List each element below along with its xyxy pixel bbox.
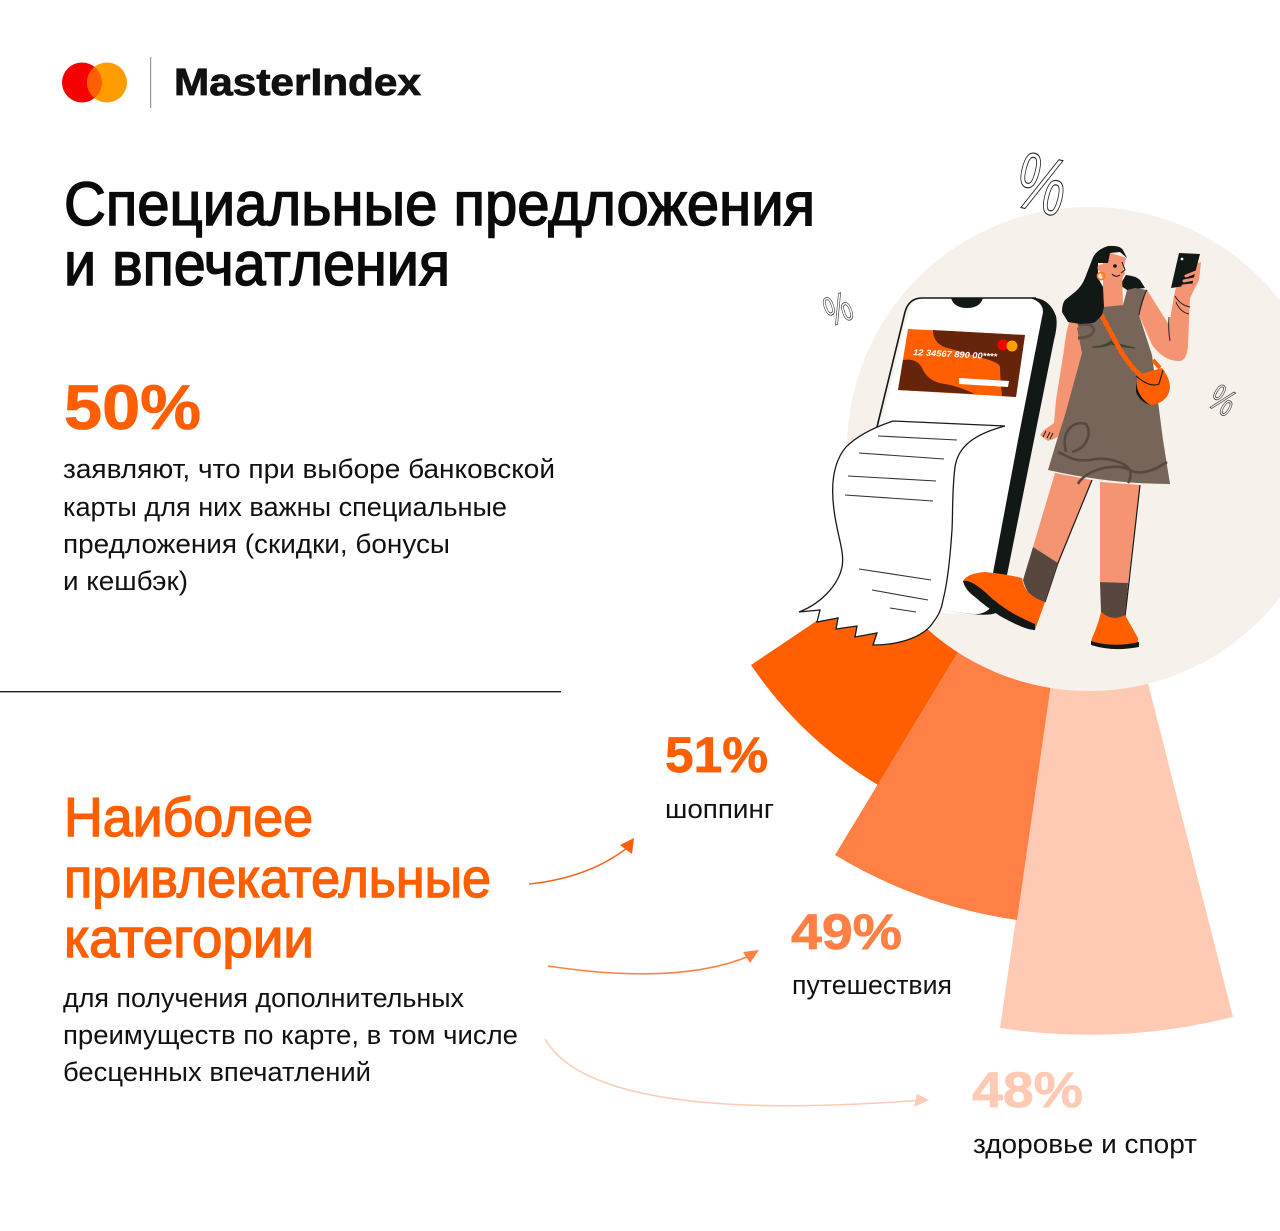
heading: categories: привлекательные: [64, 847, 491, 909]
ear and earring: [1097, 264, 1105, 272]
bag strap: [1102, 316, 1139, 374]
stat: health and sport: 48%: [972, 1062, 1083, 1118]
heading: categories: [64, 786, 491, 969]
text block: categories description: для получения дополнительных: [63, 983, 464, 1013]
text block: categories description: бесценных впечатлений: [63, 1057, 371, 1087]
stat: travel: 49%: [791, 904, 902, 960]
logo: MasterIndex: MasterIndex: [174, 62, 421, 104]
left arm: [1040, 320, 1088, 441]
text block: 50% description: заявляют, что при выборе банковской: [63, 454, 555, 484]
text block: 50% description: карты для них важны специальные: [63, 492, 507, 522]
bank card: 12 34567 890 00****: [913, 347, 998, 361]
stat: shopping: шоппинг: [665, 794, 774, 824]
illustration: receipt: [799, 421, 1005, 645]
back shoe: [963, 572, 1045, 630]
icon: percent large: %: [1007, 134, 1077, 234]
title: Специальные предложения: [64, 170, 815, 238]
text block: 50% description: предложения (скидки, бонусы: [63, 529, 450, 559]
front shoe: [1091, 612, 1138, 647]
stat: shopping: 51%: [665, 727, 768, 783]
text block: categories description: преимуществ по карте, в том числе: [63, 1020, 518, 1050]
stat: travel: [791, 904, 952, 1000]
icon: percent left: %: [817, 282, 859, 336]
bank card: [898, 329, 1025, 397]
stat: health and sport: [972, 1062, 1197, 1159]
stat: shopping: [665, 727, 774, 824]
chart: wedge shopping: [751, 440, 1086, 785]
stat: travel: путешествия: [792, 970, 952, 1000]
eye and smile: [1113, 264, 1117, 268]
front leg: [1100, 482, 1140, 583]
text block: categories description: [63, 983, 518, 1087]
bag: [1137, 368, 1170, 405]
hair: [1062, 246, 1127, 324]
stat: health and sport: здоровье и спорт: [973, 1129, 1197, 1159]
neck and chest: [1103, 275, 1123, 308]
chart: wedge health and sport: [1000, 440, 1233, 1035]
beige circle: [847, 207, 1280, 691]
title: [64, 170, 815, 298]
arrow: health and sport: [545, 1039, 929, 1107]
fingers: [1183, 272, 1196, 286]
face: [1100, 252, 1126, 287]
heading: categories: Наиболее: [64, 786, 313, 848]
held phone: [1171, 253, 1200, 288]
text block: 50% description: [63, 454, 555, 596]
arrow: shopping: [529, 838, 634, 884]
icon: percent right: %: [1202, 376, 1244, 424]
right arm: [1139, 262, 1201, 361]
arrow: travel: [548, 950, 759, 974]
illustration: woman: [963, 246, 1201, 649]
heading: categories: категории: [64, 907, 314, 969]
text block: 50% description: и кешбэк): [63, 566, 188, 596]
divider: [0, 691, 561, 692]
chart: wedge travel: [835, 440, 1086, 920]
stat: 50%: 50%: [64, 373, 201, 443]
title: и впечатления: [64, 230, 450, 298]
dress: [1048, 288, 1170, 484]
illustration: smartphone: [845, 298, 1057, 615]
hair back: [1120, 275, 1145, 290]
logo: MasterIndex: [62, 57, 421, 108]
back leg: [1033, 473, 1092, 563]
